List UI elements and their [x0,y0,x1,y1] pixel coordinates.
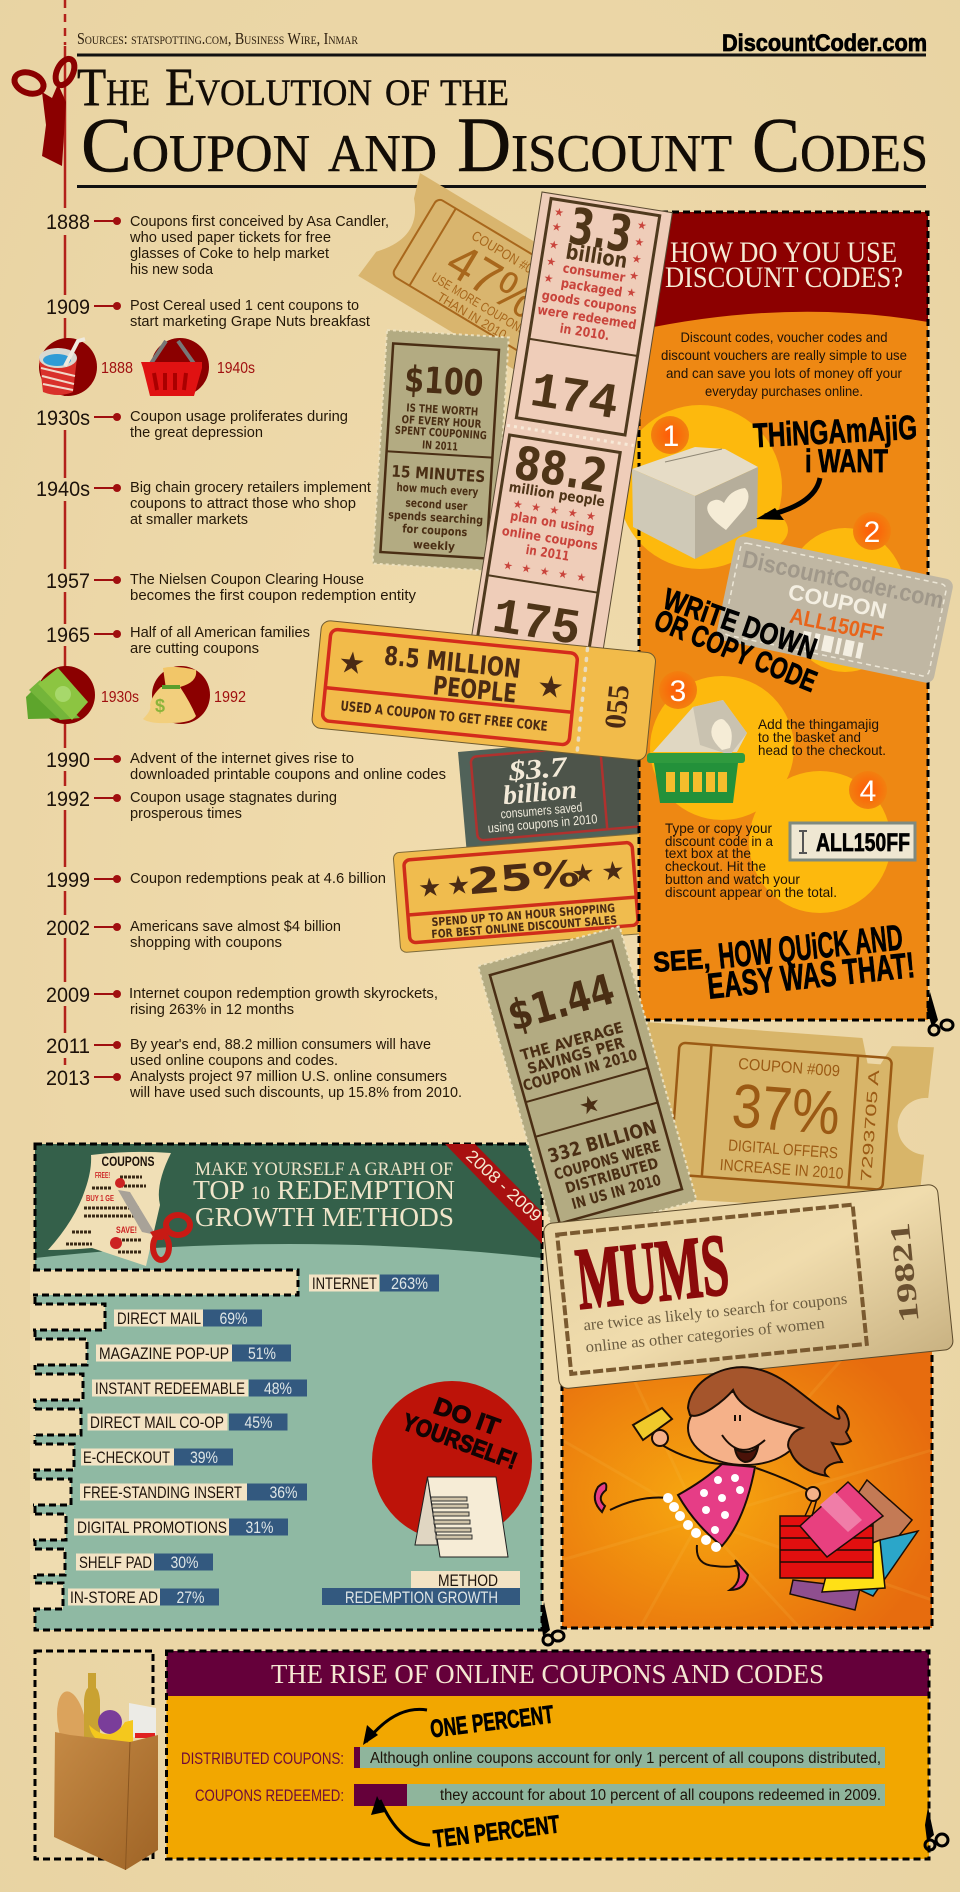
bar: shelf pad: SHELF PAD [79,1553,152,1572]
ticket: pink 3.3 billion and 88.2 million: ★ [553,205,565,220]
panel: grocery bag [35,1651,158,1870]
icon: soda cup 1888 [39,338,133,396]
icon: money bag 1992: 1992 [214,689,246,706]
ticket: $100: SPENT COUPONING [395,424,487,442]
arrow: one percent: ONE PERCENT [429,1701,555,1743]
ticket: coupon 37%: DIGITAL OFFERS [728,1137,838,1162]
ticket: pink 3.3 billion and 88.2 million: ★ [631,252,643,266]
badge 3 [659,671,697,709]
ticket: pink 3.3 billion and 88.2 million: plan on using [509,509,595,537]
timeline: 2013 [46,1067,462,1101]
timeline: 1888: 1888 [46,211,90,234]
bar: direct mail [30,1304,262,1330]
ticket: coupon 47%: THAN IN 2010 [435,289,509,342]
timeline: 1940s: coupons to attract those who shop [130,495,356,512]
title: THE [77,57,150,117]
bar: digital promotions: 31% [246,1518,274,1537]
timeline: 1992 [46,788,337,822]
arrow: ten percent: TEN PERCENT [432,1810,561,1854]
ticket: pink 3.3 billion and 88.2 million: 175 [488,590,584,660]
timeline: 1965 [46,624,310,657]
timeline: 2013: 2013 [46,1067,90,1090]
ticket: pink 3.3 billion and 88.2 million: in 2011 [525,543,570,565]
timeline: 1909: Post Cereal used 1 cent coupons to [130,297,359,314]
ticket: $100: IS THE WORTH [406,401,479,419]
heading: DISCOUNT CODES? [665,261,903,294]
icon: black scissors on graph panel [541,1602,564,1645]
ticket: pink 3.3 billion and 88.2 million: consumer [562,261,627,286]
ticket: pink 3.3 billion and 88.2 million: ★ [551,220,563,234]
icon: red basket 1940s: 1940s [217,360,255,377]
step 4 text: checkout. Hit the [665,858,766,874]
step 3 text: head to the checkout. [758,742,886,758]
ticket: pink 3.3 billion and 88.2 million: ★ [625,286,637,300]
legend: METHOD [438,1571,498,1590]
timeline: 1940s: Big chain grocery retailers implement [130,479,372,496]
timeline: 1940s: 1940s [36,478,90,501]
ticket: pink 3.3 billion and 88.2 million: ★ [636,218,648,233]
icon: soda cup 1888: 1888 [101,360,133,377]
step 4 text: discount code in a [665,833,773,849]
ticket: mums [543,1184,954,1389]
bar: direct mail co-op: DIRECT MAIL CO-OP [90,1413,224,1432]
title: CODES [752,101,928,188]
yellow blobs [618,405,907,913]
ticket: 8.5 million people: 055 [599,683,636,730]
ticket: $1.44: IN US IN 2010 [570,1171,663,1213]
ticket: $1.44: $1.44 [502,964,620,1041]
ticket: 8.5 million people [311,620,656,761]
timeline: 1965: are cutting coupons [130,640,259,657]
ticket: $1.44: COUPONS WERE [552,1137,663,1184]
ticket: $1.44: ★ [576,1089,604,1121]
ticket: $1.44: SAVINGS PER [525,1034,627,1078]
bar: direct mail co-op: 45% [244,1413,272,1432]
bar: direct mail: 69% [220,1309,248,1328]
bar: e-checkout [30,1444,233,1470]
ticket: coupon 37% [632,1022,934,1218]
bar: in-store ad: 27% [176,1588,204,1607]
icon: coupons paper and scissors: BUY 1 GE [86,1194,114,1203]
timeline: 1992: prosperous times [130,805,242,822]
ticket: $100: weekly [413,537,456,554]
ticket: $1.44: THE AVERAGE [518,1018,625,1064]
panel: mums orange background [562,1340,932,1628]
ticket: 25%: 25% [466,854,581,903]
ticket: 25%: ★ [417,872,443,904]
arrow: one percent [363,1701,555,1745]
bar: digital promotions [30,1514,288,1540]
ticket: gray discount coupon [715,535,954,684]
ribbon: 2008-2009 [445,1144,545,1244]
bar: shelf pad [30,1549,213,1575]
handwritten: write down or copy code: WRiTE DOWN [659,583,821,666]
ticket: $100: spends searching [388,507,483,527]
bar: e-checkout: E-CHECKOUT [83,1448,170,1467]
heading: THE RISE OF ONLINE COUPONS AND CODES [271,1659,824,1689]
icon: coupons paper and scissors: SAVE! [116,1225,137,1235]
ticket: 25%: ★ [570,858,596,890]
ticket: pink 3.3 billion and 88.2 million: ★ [548,238,560,252]
icon: coupons paper and scissors: FREE! [95,1171,110,1180]
timeline: 2002: Americans save almost $4 billion [130,918,341,935]
timeline: 2009: 2009 [46,984,90,1007]
icon: money bag 1992 [143,666,246,724]
timeline: 1990: Advent of the internet gives rise to [130,750,354,767]
timeline: 1990: downloaded printable coupons and online codes [130,766,446,783]
ticket: pink 3.3 billion and 88.2 million: ★ [545,255,557,269]
icon: box in basket [647,700,747,803]
row: distributed coupons: DISTRIBUTED COUPONS: [181,1749,344,1768]
ticket: coupon 47%: COUPON #009 [469,227,548,283]
do it yourself circle [372,1381,532,1557]
ticket: 25%: ★ [600,856,626,888]
timeline: 2009: rising 263% in 12 months [130,1001,294,1018]
ticket: mums: are twice as likely to search for coupons [583,1291,848,1334]
row: coupons redeemed [195,1784,885,1806]
ticket: pink 3.3 billion and 88.2 million: ★ [628,269,640,283]
ticket: mums: MUMS [572,1217,733,1329]
title: AND [328,125,437,183]
timeline: 2013: will have used such discounts, up 15.8% from 2010. [129,1084,462,1101]
bar: magazine pop-up: 51% [248,1344,276,1363]
badge 4: 4 [860,775,876,808]
icon: coupons paper and scissors [48,1152,190,1266]
sources line: Sources: statspotting.com, Business Wire, Inmar [77,29,358,48]
icon: money bag 1992: $ [155,696,165,716]
ticket: 25%: SPEND UP TO AN HOUR SHOPPING [431,901,616,929]
handwritten: write down or copy code: OR COPY CODE [650,604,821,699]
heading: MAKE YOURSELF A GRAPH OF [195,1159,453,1180]
ticket: pink 3.3 billion and 88.2 million: 88.2 [511,435,611,503]
ticket: $100: IN 2011 [422,438,458,454]
bar: direct mail co-op [30,1409,288,1435]
input box ALL150FF: ALL150FF [816,829,910,857]
step 4 text: text box at the [665,845,751,861]
timeline: 1940s [36,478,372,528]
ticket: pink 3.3 billion and 88.2 million: 174 [526,364,622,434]
ticket: pink 3.3 billion and 88.2 million: goods coupons [541,288,638,318]
badge 1 [651,416,689,454]
timeline: 1888: glasses of Coke to help market [130,245,330,262]
step 4 text: Type or copy your [665,820,772,836]
logo: DiscountCoder.com: DiscountCoder.com [722,30,927,57]
bar: in-store ad: IN-STORE AD [70,1588,158,1607]
row: distributed coupons [181,1747,885,1768]
bar: instant redeemable: INSTANT REDEEMABLE [95,1379,245,1398]
bar: magazine pop-up: MAGAZINE POP-UP [99,1344,229,1363]
timeline: 1957: 1957 [46,570,90,593]
timeline: 1965: 1965 [46,624,90,647]
bar: in-store ad [30,1583,219,1609]
ticket: coupon 37%: 37% [730,1072,842,1148]
timeline: 1992: 1992 [46,788,90,811]
step 4 text: button and watch your [665,871,800,887]
ticket: coupon 37%: COUPON #009 [738,1056,841,1080]
bar: shelf pad: 30% [170,1553,198,1572]
title [77,54,928,188]
ticket: 8.5 million people: ★ [337,645,367,682]
ticket: pink 3.3 billion and 88.2 million: online coupons [501,524,599,554]
ticket: $100: OF EVERY HOUR [401,413,482,431]
step 3 text: to the basket and [758,729,861,745]
ticket: gray discount coupon: ALL150FF [788,603,886,647]
ticket: $1.44: DISTRIBUTED [563,1154,660,1197]
ticket: coupon 47%: USE MORE COUPONS [429,269,530,338]
timeline: 2009: Internet coupon redemption growth skyrockets, [129,985,438,1002]
timeline: 1930s [36,407,348,441]
timeline: 2002 [46,917,341,951]
timeline: 2011: used online coupons and codes. [130,1052,338,1069]
intro paragraph: Discount codes, voucher codes and [680,329,888,345]
ticket: $100: $100 [403,359,485,405]
badge 3: 3 [670,675,686,708]
input box ALL150FF [790,823,915,860]
ticket: pink 3.3 billion and 88.2 million: ★★★★★ [512,497,597,523]
do it yourself circle: YOURSELF! [399,1409,521,1475]
ticket: pink 3.3 billion and 88.2 million: ★ [543,271,555,286]
icon: green cash 1930s: 1930s [101,689,139,706]
timeline: 2011: By year's end, 88.2 million consumers will have [130,1036,431,1053]
intro paragraph [661,329,907,399]
ticket: gray discount coupon: COUPON [786,579,889,624]
timeline: 1957 [46,570,416,604]
ticket: $3.7 billion saved [458,734,673,852]
icon: red basket 1940s [141,338,255,396]
ticket: pink 3.3 billion and 88.2 million: billion [564,240,629,273]
timeline: 2013: Analysts project 97 million U.S. online consumers [130,1068,447,1085]
ticket: pink 3.3 billion and 88.2 million: were redeemed [536,303,637,333]
bar: magazine pop-up [30,1339,291,1365]
row: coupons redeemed: COUPONS REDEEMED: [195,1786,344,1805]
handwritten: see how quick and easy [652,916,917,1007]
timeline: 1990 [46,749,446,783]
ticket: pink 3.3 billion and 88.2 million: 3.3 [565,197,636,264]
do it yourself circle: DO IT [430,1393,503,1441]
ticket: 25%: FOR BEST ONLINE DISCOUNT SALES [431,913,617,941]
timeline: 1888: Coupons first conceived by Asa Candler, [130,213,389,230]
bar: internet [30,1270,439,1295]
ticket: pink 3.3 billion and 88.2 million [466,192,672,692]
title: DISCOUNT [457,101,732,188]
intro paragraph: discount vouchers are really simple to use [661,347,907,363]
ticket: pink 3.3 billion and 88.2 million: million people [508,480,606,511]
step 3 text: Add the thingamajig [758,716,879,732]
timeline: 1999 [46,869,386,892]
bar: direct mail: DIRECT MAIL [117,1309,201,1328]
bar: free-standing insert: FREE-STANDING INSERT [83,1483,242,1502]
timeline: 1999: 1999 [46,869,90,892]
ticket: pink 3.3 billion and 88.2 million: in 2010. [559,322,610,344]
badge 2: 2 [864,516,880,549]
legend [322,1571,520,1607]
ticket: $100 [373,330,509,571]
ticket: 25%: ★ [446,870,472,902]
bar: free-standing insert [30,1479,307,1505]
ticket: $3.7 billion saved: $3.7 [506,752,569,788]
bar: digital promotions: DIGITAL PROMOTIONS [77,1518,227,1537]
badge 4 [849,771,887,809]
timeline: 2002: shopping with coupons [130,934,282,951]
badge 1: 1 [663,420,679,453]
ticket: mums: 19821 [885,1221,926,1324]
ticket: coupon 47% [358,173,645,411]
arrow: ten percent [371,1796,561,1854]
ticket: $100: for coupons [402,521,468,539]
timeline: 1965: Half of all American families [130,624,310,641]
heading: HOW DO YOU USE [670,236,897,269]
timeline: 1930s: Coupon usage proliferates during [130,408,348,425]
handwritten: thingamajig i want [752,409,918,479]
ticket: $100: second user [405,495,468,513]
timeline: 1909: start marketing Grape Nuts breakfast [130,313,371,330]
bar: internet: 263% [391,1274,428,1293]
ticket: pink 3.3 billion and 88.2 million: ★★★★★ [502,559,587,585]
title: THE [440,73,509,114]
timeline spine [64,0,66,1065]
icon: cardboard box with heart [632,447,758,559]
ticket: $3.7 billion saved: billion [502,774,578,810]
step 4 text: discount appear on the total. [665,884,837,900]
ribbon: 2008-2009: 2008 - 2009 [462,1146,545,1226]
badge 2 [853,512,891,550]
heading [193,1159,455,1232]
timeline: 1990: 1990 [46,749,90,772]
panel: top 10 redemption growth methods [30,1144,545,1630]
panel: how do you use discount codes [618,212,928,1020]
bar: instant redeemable [30,1374,307,1400]
timeline: 1957: becomes the first coupon redemption entity [130,587,416,604]
timeline: 1930s: the great depression [130,424,263,441]
timeline: 2002: 2002 [46,917,90,940]
heading [665,236,903,294]
illustration: girl [595,1367,851,1590]
ticket: $100: 15 MINUTES [391,462,486,486]
timeline: 1909 [46,296,371,330]
icon: red scissors on timeline [11,56,78,166]
ticket: mums: online as other categories of women [585,1315,825,1356]
ticket: $1.44: COUPON IN 2010 [521,1046,639,1095]
ticket: $1.44 [478,926,697,1240]
ticket: 8.5 million people: ★ [535,669,566,706]
intro paragraph: everyday purchases online. [705,383,863,399]
heading: TOP 10 REDEMPTION [193,1175,455,1205]
ticket: 25% [393,833,658,953]
bar: e-checkout: 39% [190,1448,218,1467]
ticket: 8.5 million people: 8.5 MILLION [383,641,522,685]
timeline: 1957: The Nielsen Coupon Clearing House [130,571,364,588]
bar: instant redeemable: 48% [264,1379,292,1398]
icon: black scissors bottom [925,1807,948,1850]
row: coupons redeemed: they account for about 10 percent of all coupons redeemed in 2009. [440,1787,881,1804]
title: OF [385,73,430,114]
icon: black scissors on how panel [927,992,953,1035]
icon: green cash 1930s [26,666,139,724]
timeline: 1999: Coupon redemptions peak at 4.6 billion [130,870,386,887]
icon: coupons paper and scissors: COUPONS [102,1153,154,1169]
ticket: pink 3.3 billion and 88.2 million: ★ [633,235,645,250]
title: COUPON [81,101,310,188]
intro paragraph: and can save you lots of money off your [666,365,902,381]
timeline: 1909: 1909 [46,296,90,319]
bar: internet: INTERNET [312,1274,377,1293]
panel: rise of online coupons [166,1651,929,1859]
ticket: 8.5 million people: PEOPLE [431,671,518,710]
timeline: 1940s: at smaller markets [130,511,248,528]
ticket: coupon 47%: 47% [437,232,548,330]
timeline: 1888 [46,211,389,278]
heading: GROWTH METHODS [195,1202,454,1232]
ticket: $3.7 billion saved: consumers saved [500,799,583,821]
handwritten: write down or copy code [650,583,821,699]
title: EVOLUTION [165,57,372,117]
ticket: pink 3.3 billion and 88.2 million: packaged [560,276,623,301]
handwritten: thingamajig i want: i WANT [805,443,888,479]
timeline: 2011: 2011 [46,1035,90,1058]
timeline: 1992: Coupon usage stagnates during [130,789,337,806]
timeline: 1930s: 1930s [36,407,90,430]
timeline: 1888: who used paper tickets for free [129,229,331,246]
ticket: coupon 37%: INCREASE IN 2010 [719,1157,844,1183]
illustration: shopping bags [780,1480,918,1610]
step 4 text [665,820,837,900]
timeline: 2009 [46,984,438,1018]
ticket: $100: how much every [396,480,479,499]
timeline: 1888: his new soda [130,261,214,278]
legend: REDEMPTION GROWTH [345,1588,498,1607]
arrow to box [756,478,820,520]
step 3 text [758,716,886,758]
ticket: $3.7 billion saved: using coupons in 2010 [487,811,598,836]
ticket: coupon 37%: 7293705 A [858,1069,883,1182]
handwritten: see how quick and easy: SEE, [652,943,711,978]
row: distributed coupons: Although online coupons account for only 1 percent of all coupons distributed, [370,1750,881,1767]
ticket: $1.44: 332 BILLION [545,1116,659,1168]
groceries [52,1673,156,1761]
bar: free-standing insert: 36% [270,1483,298,1502]
ticket: 8.5 million people: USED A COUPON TO GET FREE COKE [340,698,548,735]
timeline: 2011 [46,1035,431,1069]
